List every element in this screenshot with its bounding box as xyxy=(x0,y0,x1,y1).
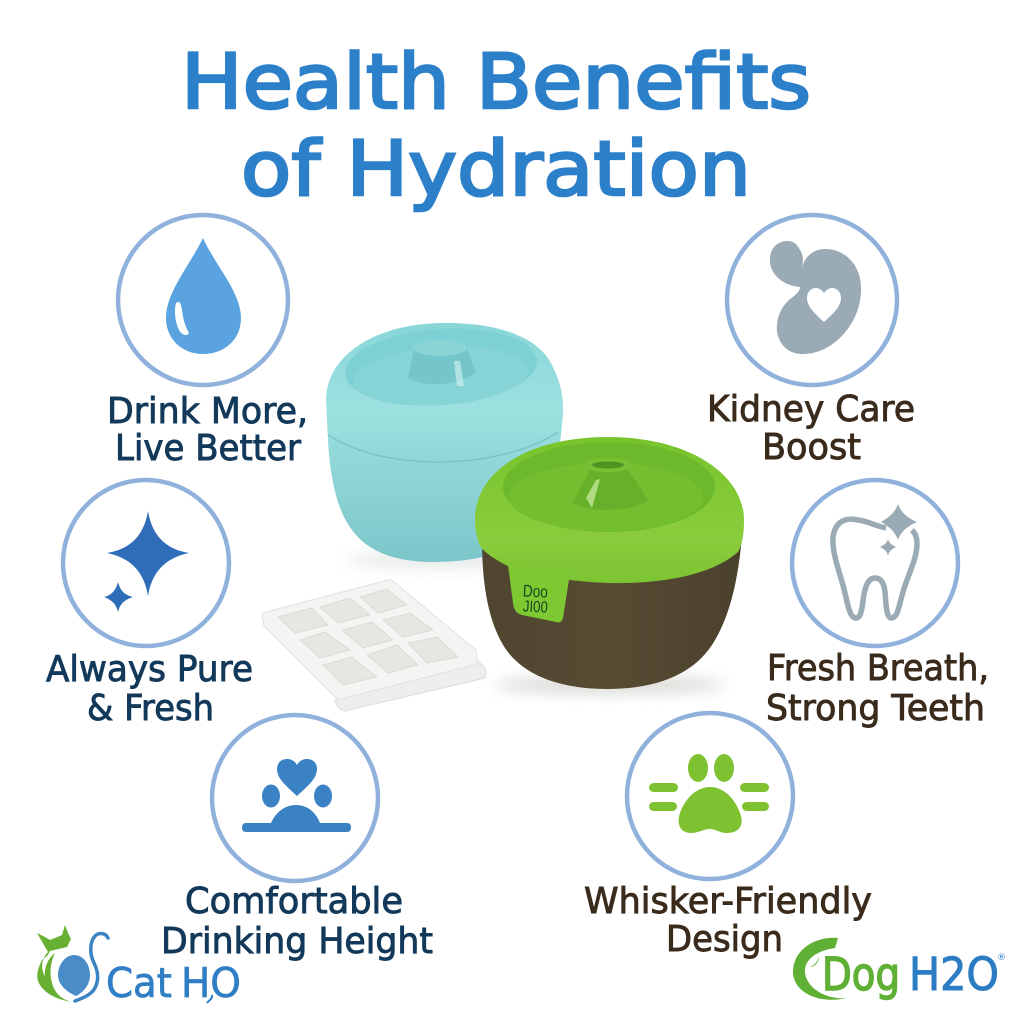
benefit: drink more xyxy=(107,215,308,469)
logo: Cat H2O: HO xyxy=(181,959,241,1007)
title xyxy=(181,37,811,213)
benefit: kidney care: Boost xyxy=(762,427,861,468)
icon: tooth with sparkles xyxy=(833,504,917,618)
benefit: comfortable height xyxy=(161,715,433,962)
logo: Cat H2O: Cat xyxy=(106,959,172,1007)
benefit: kidney care: Kidney Care xyxy=(707,389,915,430)
icon: kidney with heart xyxy=(770,241,861,354)
label tab: JI00 xyxy=(522,598,548,617)
title: of Hydration xyxy=(241,124,751,213)
icon: water drop xyxy=(166,238,241,354)
label tab: Doo xyxy=(522,581,548,602)
benefit: fresh breath xyxy=(766,480,989,729)
label tab xyxy=(508,565,570,622)
logo: Cat H2O xyxy=(37,925,241,1007)
product: green and brown water fountain xyxy=(475,437,744,694)
product: teal water fountain xyxy=(326,322,563,569)
benefit: whisker friendly: Design xyxy=(666,919,783,960)
logo: Dog H2O: Dog xyxy=(822,948,900,1001)
product: replacement filter pad xyxy=(262,580,486,711)
icon: sparkles xyxy=(104,511,189,612)
title: Health Benefits xyxy=(181,37,811,126)
benefit: fresh breath: Strong Teeth xyxy=(766,688,985,729)
logo: Dog H2O: ® xyxy=(997,953,1006,963)
benefit: comfortable height: Drinking Height xyxy=(161,921,433,962)
benefit: comfortable height: Comfortable xyxy=(185,881,403,922)
benefit: drink more: Live Better xyxy=(115,428,301,469)
benefit: always pure xyxy=(46,480,253,729)
benefit: whisker friendly xyxy=(584,713,872,960)
benefit: drink more: Drink More, xyxy=(107,391,308,432)
benefit: fresh breath: Fresh Breath, xyxy=(767,648,989,689)
benefit: always pure: Always Pure xyxy=(46,649,253,690)
icon: paw with whiskers xyxy=(649,754,769,833)
benefit: kidney care xyxy=(707,215,915,468)
logo: Dog H2O xyxy=(793,938,1006,1001)
icon: heart paw on a raised line xyxy=(242,759,351,832)
logo: Dog H2O: H2O xyxy=(909,948,999,1001)
benefit: whisker friendly: Whisker-Friendly xyxy=(584,881,872,922)
benefit: always pure: & Fresh xyxy=(87,688,214,729)
